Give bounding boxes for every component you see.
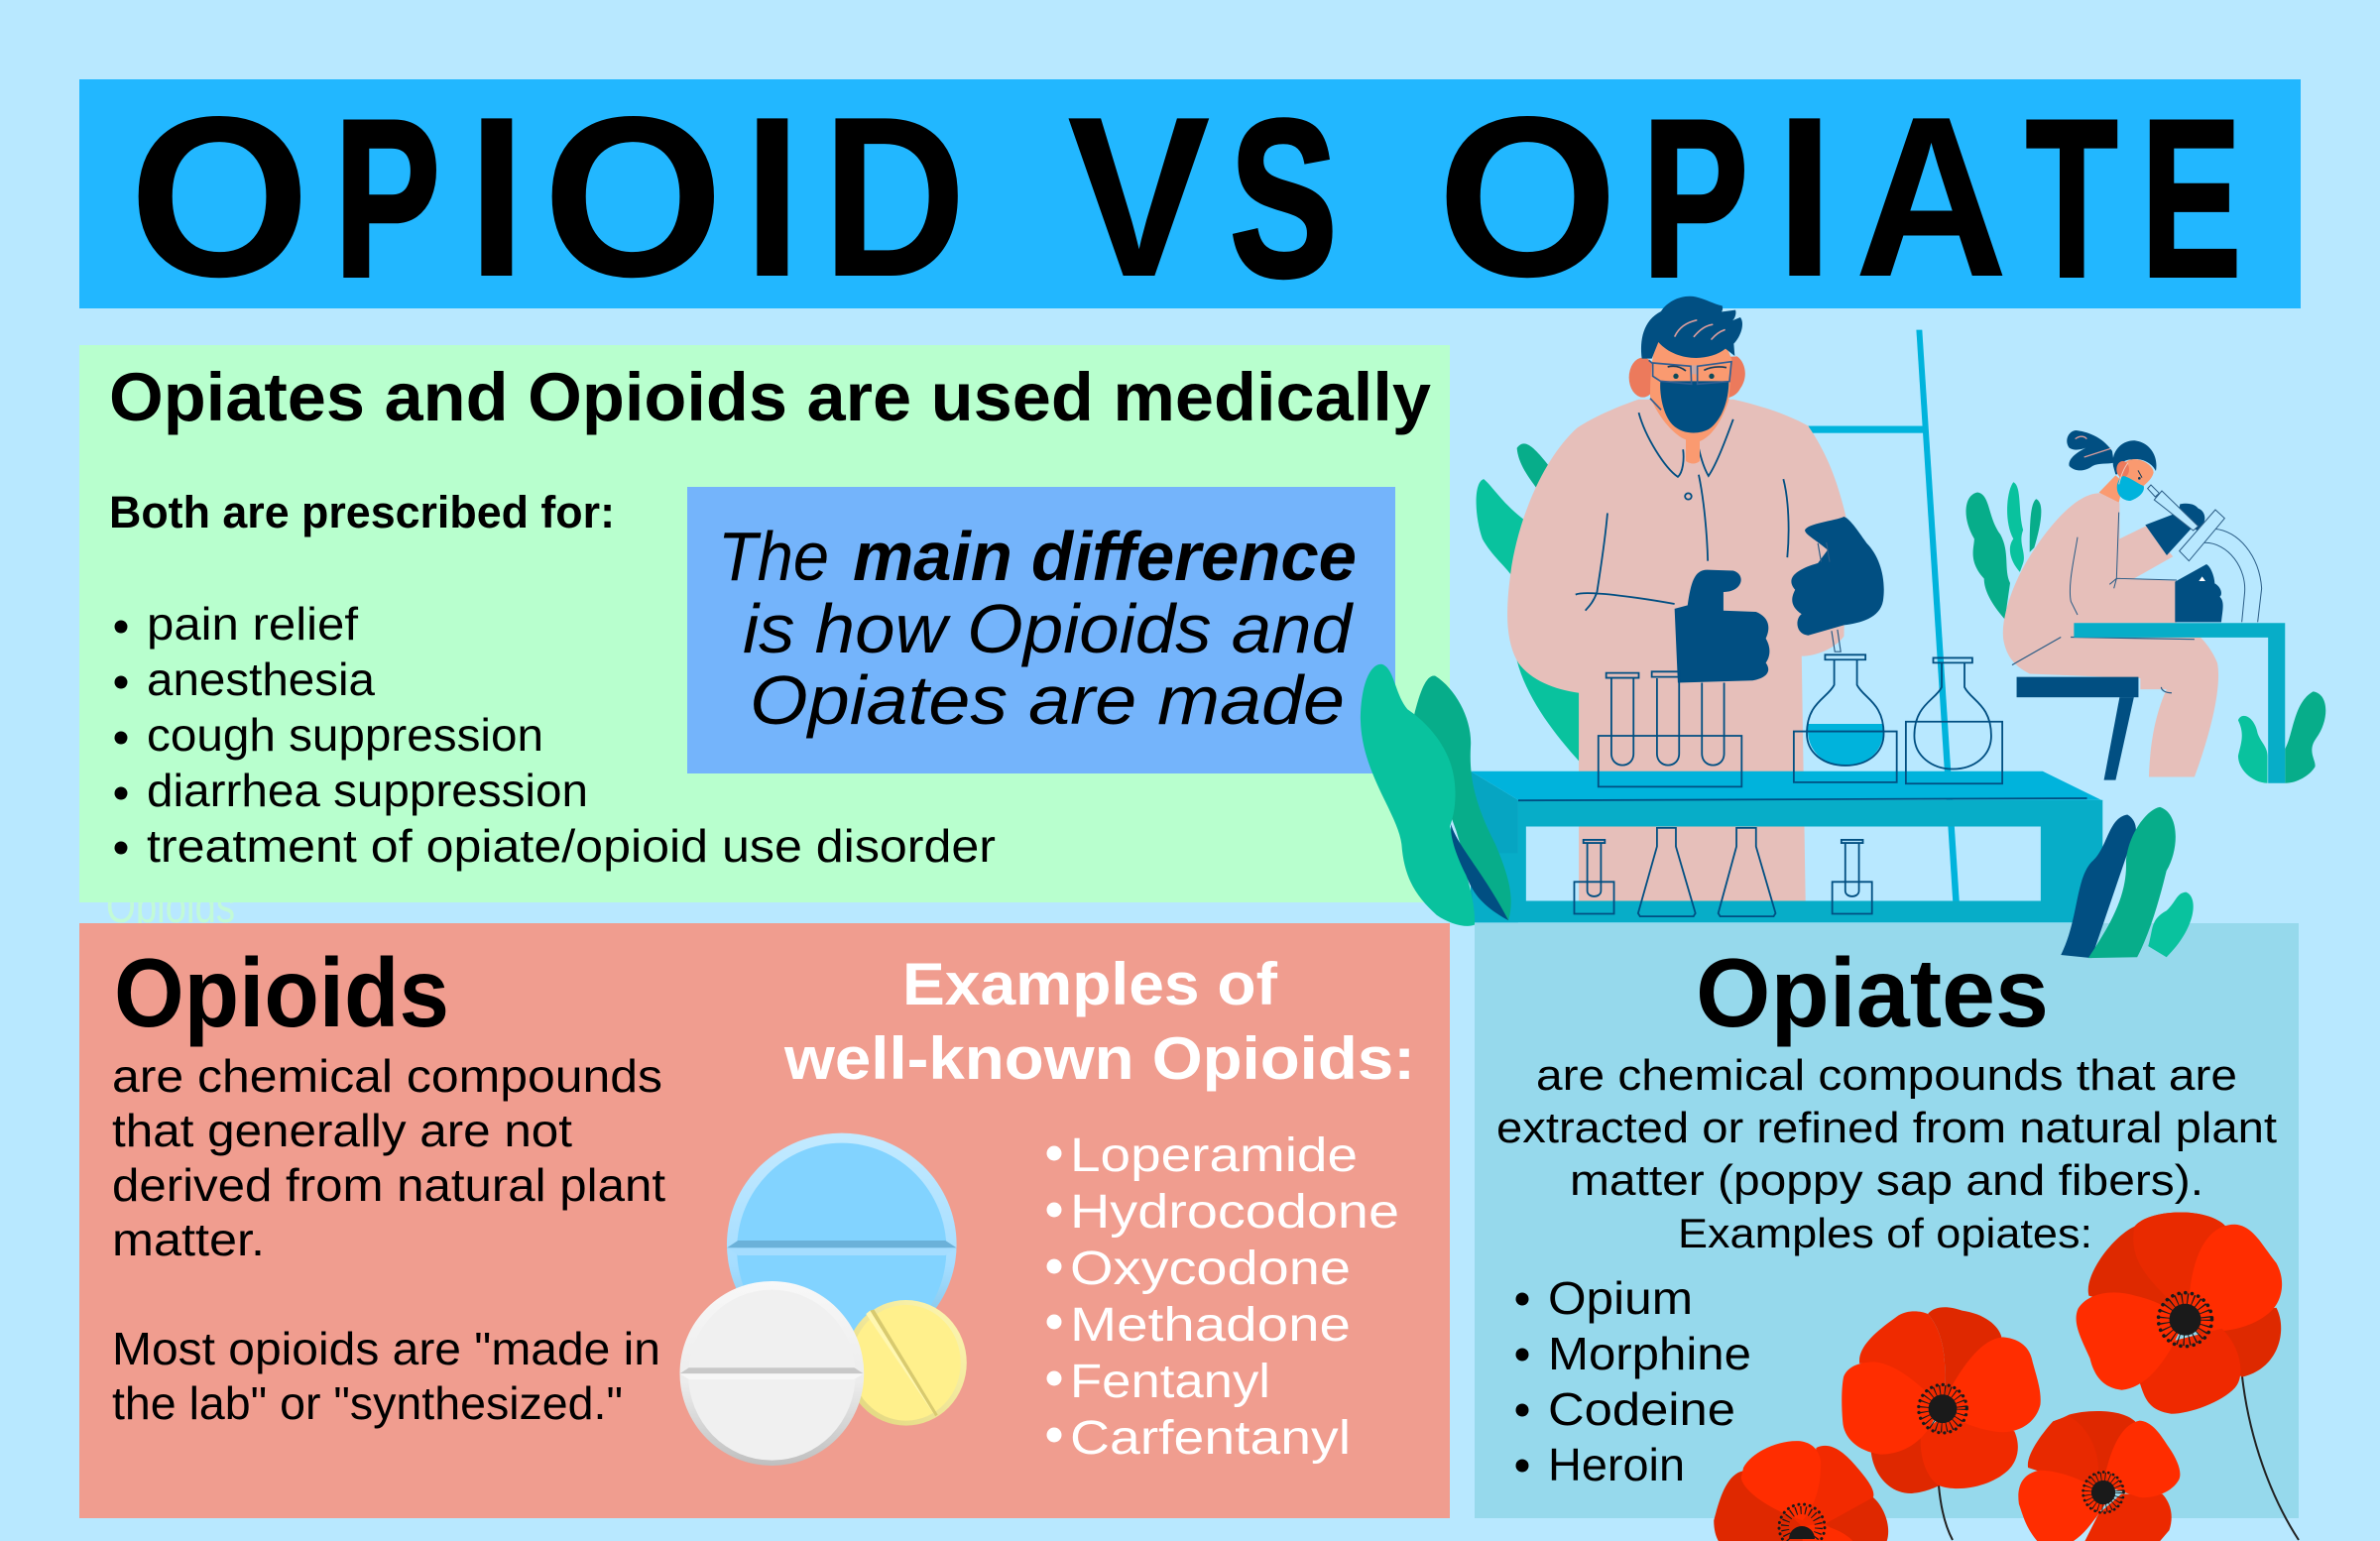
heading: opioids: Opioids: [114, 938, 449, 1047]
list: prescribed uses: diarrhea suppression: [147, 765, 588, 816]
illustration: woman's head and microscope: [2067, 430, 2262, 622]
callout: main difference: is how Opioids and: [743, 590, 1354, 667]
poppy: middle: [1842, 1307, 2041, 1493]
list: opiate examples: Morphine: [1548, 1328, 1751, 1379]
callout: main difference: [687, 487, 1395, 773]
heading: opiates: Opiates: [1696, 938, 2049, 1047]
text: opioid definition: [112, 1050, 665, 1429]
list: opiate examples: Opium: [1548, 1272, 1693, 1324]
list: opioid examples: Hydrocodone: [1070, 1186, 1399, 1239]
panel: medical uses: [79, 345, 1450, 902]
gloves: [1675, 517, 1884, 682]
heading: examples of opioids: well-known Opioids:: [783, 1025, 1415, 1092]
text: opiate definition: Examples of opiates:: [1678, 1210, 2092, 1256]
pipette: [1818, 542, 1841, 652]
list: opioid examples: Loperamide: [1070, 1129, 1358, 1182]
faint hidden text: Opioids: [106, 881, 235, 933]
heading: used medically: Opiates and Opioids are used medically: [109, 359, 1431, 435]
illustration: lab scene: [1361, 330, 2325, 958]
icon: pills: [680, 1133, 967, 1466]
callout: main difference: main difference: [853, 518, 1357, 595]
callout: main difference: The: [718, 518, 829, 595]
list: prescribed uses: pain relief: [147, 598, 358, 650]
panel: opiates: [1475, 923, 2299, 1518]
list: prescribed uses: cough suppression: [147, 709, 543, 761]
list: opiate examples: Heroin: [1548, 1439, 1685, 1490]
poppy: top right: [2077, 1213, 2282, 1414]
stand: [1808, 330, 1960, 901]
glassware: [1574, 654, 2002, 916]
list: opioid examples: Carfentanyl: [1070, 1412, 1351, 1465]
front leaves right: [2061, 807, 2194, 958]
text: opiate definition: matter (poppy sap and fibers).: [1570, 1156, 2203, 1205]
list: prescribed uses: anesthesia: [147, 653, 375, 705]
text: opiate definition: [1496, 1051, 2277, 1256]
text: opioid definition: matter.: [112, 1214, 265, 1265]
illustration: man's head: [1629, 296, 1745, 463]
text: opioid definition: are chemical compounds: [112, 1050, 662, 1102]
title: [129, 68, 2241, 308]
text: opiate definition: extracted or refined from natural plant: [1496, 1104, 2277, 1152]
back leaves: [1477, 443, 1580, 763]
illustration: poppies: [1714, 1213, 2299, 1541]
list: opioid examples: [1047, 1129, 1399, 1465]
front leaves left: [1361, 664, 1511, 926]
callout: main difference: Opiates are made: [750, 661, 1345, 739]
list: opiate examples: [1515, 1272, 1751, 1490]
panel: opioids: [79, 923, 1450, 1518]
text: opioid definition: Most opioids are "made in: [112, 1323, 660, 1374]
text: opioid definition: the lab" or "synthesized.": [112, 1377, 623, 1429]
heading: examples of opioids: [783, 951, 1415, 1092]
subheading: prescribed for: Both are prescribed for:: [109, 487, 615, 537]
poppy: lower right: [2018, 1411, 2180, 1541]
list: opioid examples: Oxycodone: [1070, 1243, 1351, 1295]
heading: examples of opioids: Examples of: [902, 951, 1278, 1017]
text: opioid definition: that generally are not: [112, 1105, 572, 1156]
scientist: woman's body, stool and desk: [2003, 493, 2285, 783]
list: prescribed uses: [115, 598, 996, 872]
title banner: [79, 79, 2301, 308]
list: opioid examples: Fentanyl: [1070, 1356, 1270, 1408]
scientist: man's coat: [1507, 400, 1845, 901]
list: opioid examples: Methadone: [1070, 1299, 1351, 1352]
plants beside woman: [1966, 482, 2325, 783]
poppy: bottom left: [1714, 1441, 1888, 1541]
text: opioid definition: derived from natural plant: [112, 1159, 665, 1211]
table: [1471, 771, 2102, 922]
text: opiate definition: are chemical compounds that are: [1536, 1051, 2237, 1100]
list: opiate examples: Codeine: [1548, 1383, 1735, 1435]
list: prescribed uses: treatment of opiate/opioid use disorder: [147, 820, 996, 872]
